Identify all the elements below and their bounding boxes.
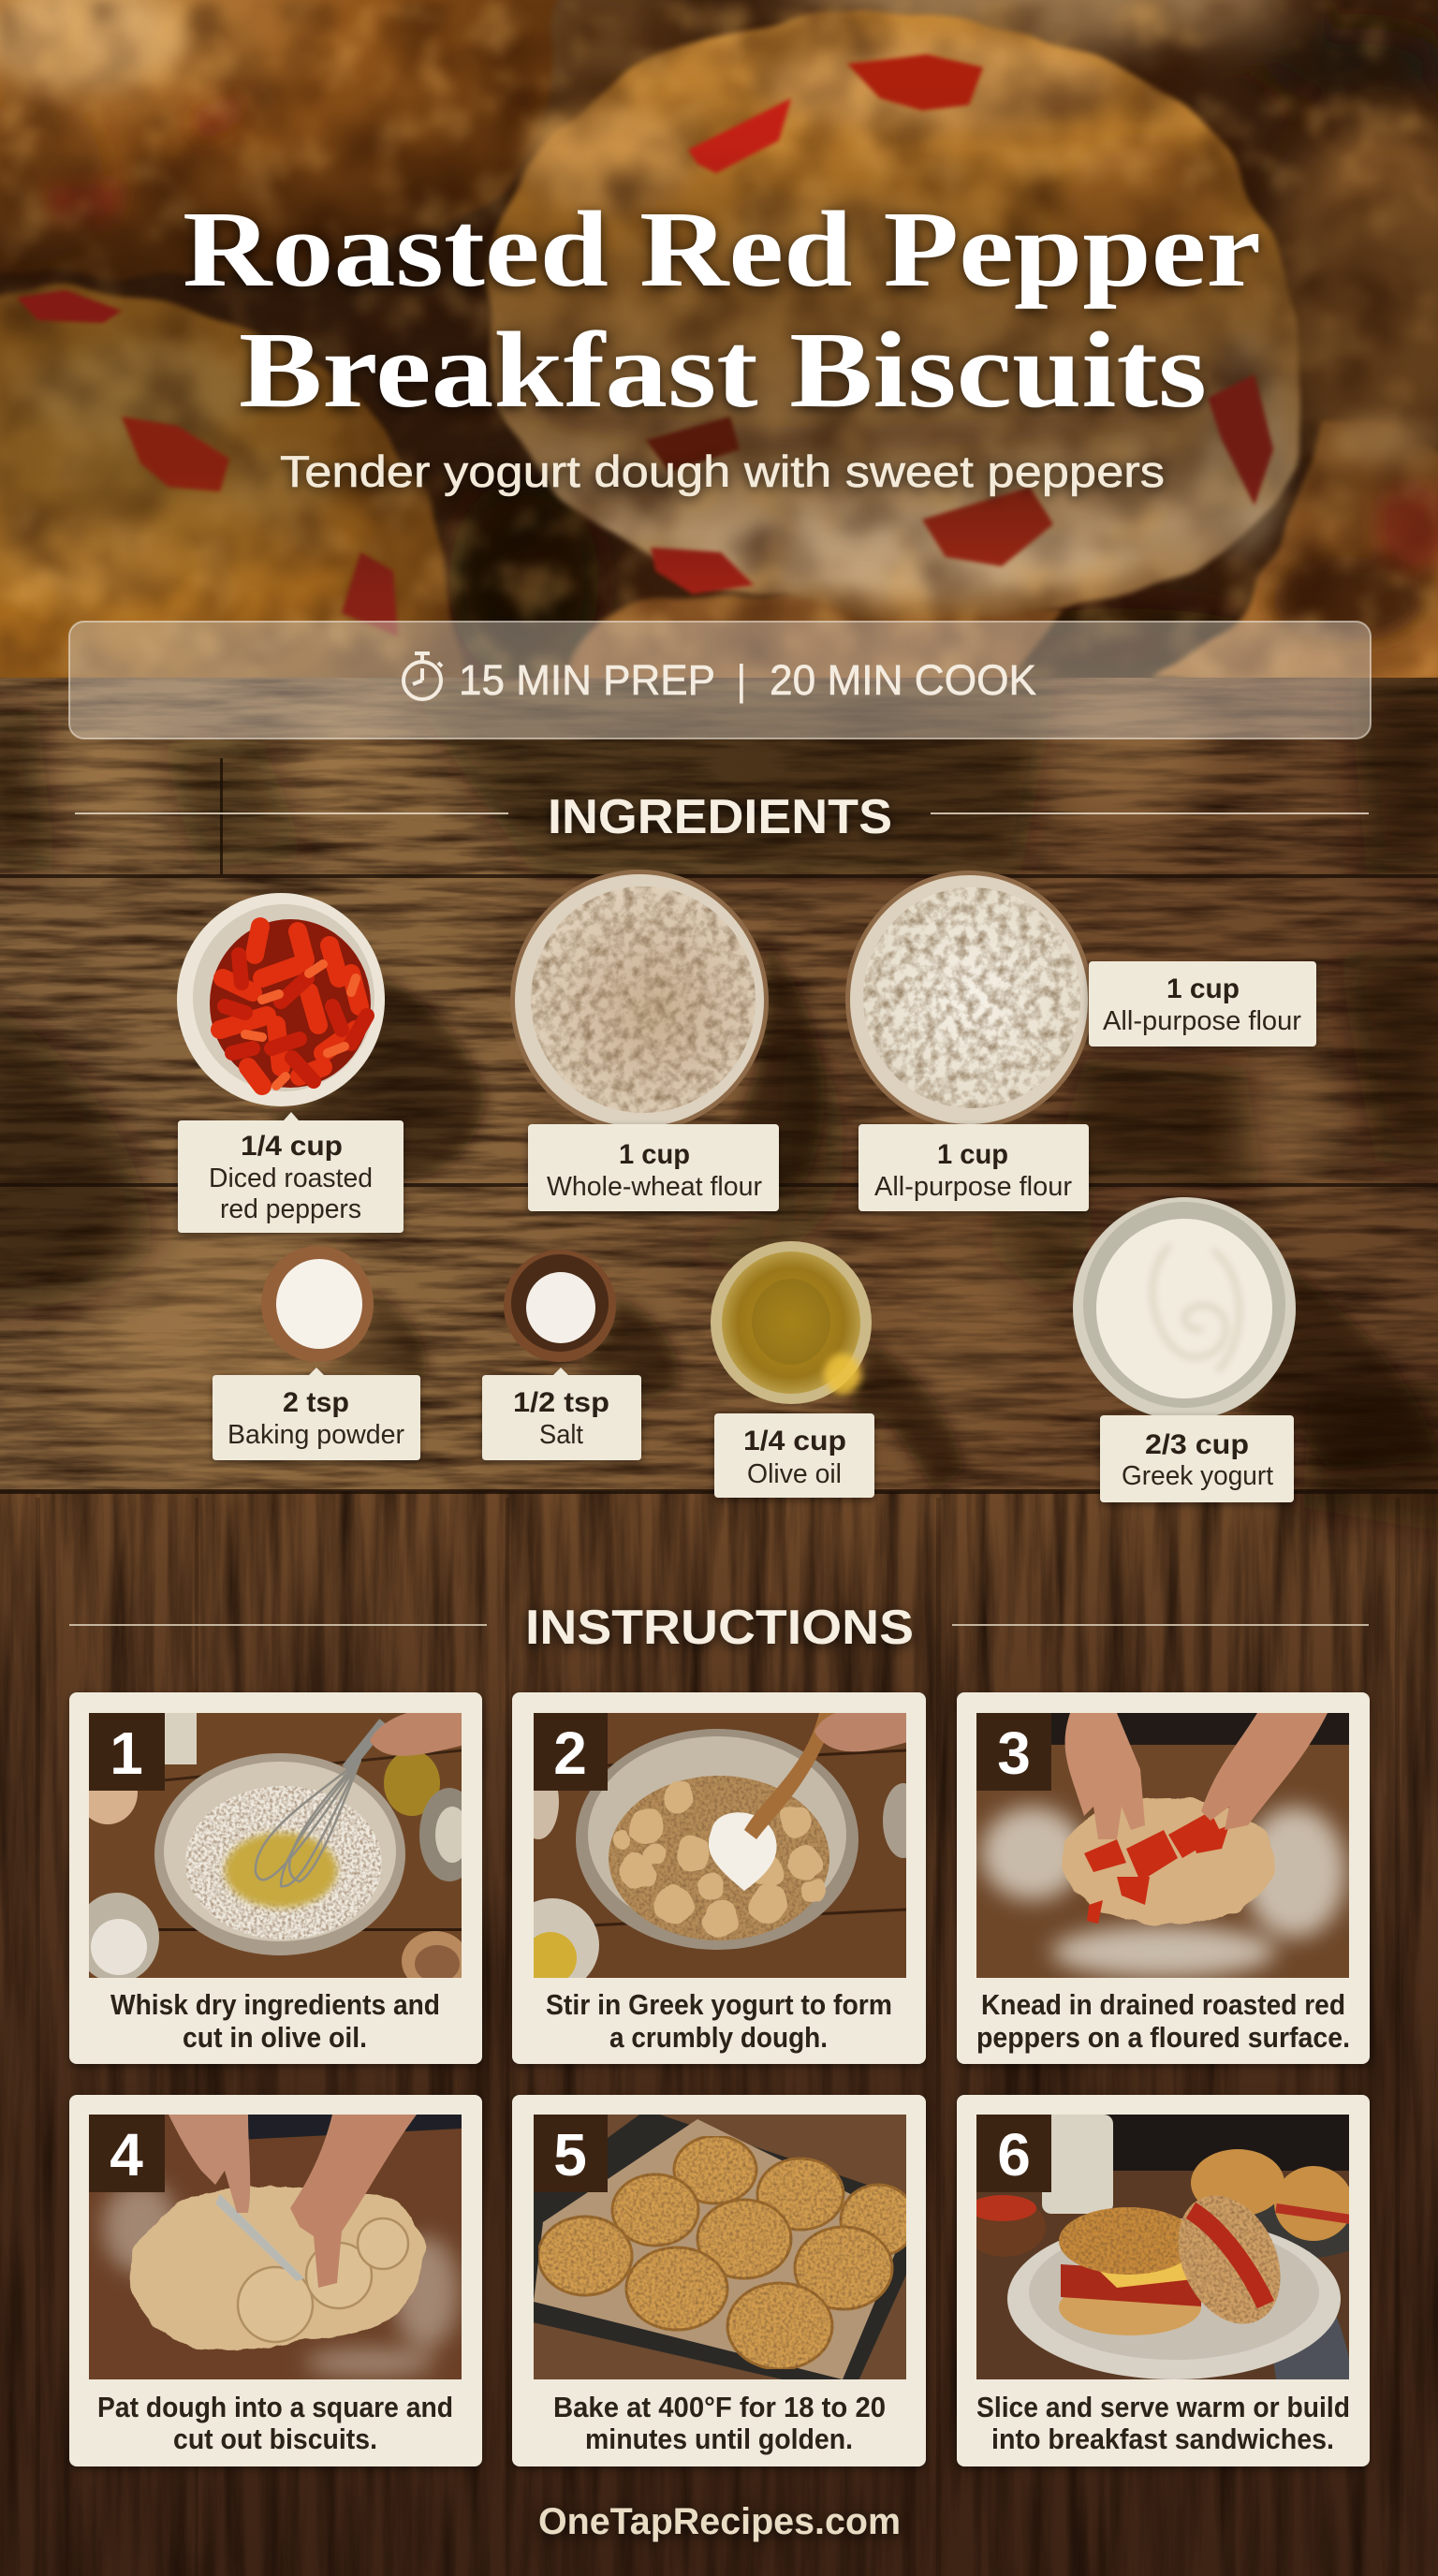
label: all-purpose flour side: 1 cup [1167,973,1240,1004]
icon: stopwatch [404,653,442,699]
step 1 caption: Whisk dry ingredients and [110,1988,440,2021]
step 1 caption: cut in olive oil. [183,2021,367,2054]
photo: stirring yogurt into dough [506,1703,927,1992]
peppers in biscuits [17,54,1273,637]
panel: step 1 [69,1692,482,2064]
step number 3: 3 [997,1720,1031,1787]
label: baking powder [213,1368,420,1460]
heading: ingredients: INGREDIENTS [548,790,892,844]
step 4 caption: cut out biscuits. [173,2422,377,2455]
bowl: olive oil [711,1241,872,1404]
panel: step 2 [506,1692,927,2064]
label: whole-wheat flour: 1 cup [619,1139,690,1170]
title: Roasted Red Pepper [183,190,1261,310]
label: diced roasted red peppers: 1/4 cup [241,1131,343,1162]
step 5 caption [553,2391,886,2455]
label: greek yogurt [1100,1415,1294,1502]
bowl: all-purpose flour [845,871,1093,1129]
footer: website: OneTapRecipes.com [538,2501,901,2542]
label: baking powder: Baking powder [227,1420,404,1450]
label: salt [482,1368,641,1460]
label: whole-wheat flour: Whole-wheat flour [547,1172,762,1202]
label: greek yogurt: 2/3 cup [1145,1429,1249,1460]
step 1 caption [110,1988,440,2054]
bowl: baking powder [261,1246,374,1362]
step 2 caption: a crumbly dough. [609,2021,828,2054]
photo: kneading peppers into dough [976,1713,1349,1978]
photo: biscuit breakfast sandwiches [963,2115,1379,2379]
step number 6 [976,2115,1051,2192]
title: Breakfast Biscuits [239,311,1207,431]
photo: whisking flour in a bowl [75,1705,482,1991]
bowl cast shadows [271,973,487,1184]
step number 2 [534,1713,608,1791]
label: whole-wheat flour [528,1124,779,1211]
time pill [69,622,1371,739]
label: all-purpose flour: 1 cup [937,1139,1008,1170]
dappled light and shadow [0,678,1438,1535]
title [183,190,1261,431]
label: diced roasted red peppers: red peppers [220,1194,361,1224]
label: olive oil: 1/4 cup [743,1426,846,1456]
heading: instructions: INSTRUCTIONS [525,1601,914,1655]
label: olive oil [714,1413,874,1498]
subtitle: Tender yogurt dough with sweet peppers [280,446,1165,496]
crust texture [0,0,1438,678]
step 3 caption [976,1988,1350,2054]
step number 1: 1 [110,1720,143,1787]
step 4 caption [97,2391,453,2455]
panel: wood background [0,678,1438,2576]
step 2 caption: Stir in Greek yogurt to form [546,1988,892,2021]
step 3 caption: peppers on a floured surface. [976,2021,1350,2054]
title scrim [0,0,1438,608]
panel: step 6 [957,2095,1379,2466]
step number 4: 4 [110,2121,143,2188]
step number 5 [534,2115,608,2192]
label: all-purpose flour: All-purpose flour [874,1172,1072,1202]
step 6 caption: Slice and serve warm or build [976,2391,1350,2423]
label: greek yogurt: Greek yogurt [1122,1461,1273,1491]
panel: hero biscuit photo [0,0,1438,688]
prep and cook times: 15 MIN PREP [459,656,715,704]
panel: step 4 [69,2095,482,2466]
bowl: whole-wheat flour [510,870,769,1132]
top-left biscuit [0,0,558,276]
bowl: roasted red peppers [177,893,385,1106]
step number 5: 5 [553,2121,587,2188]
panel: step 3 [957,1692,1370,2064]
photo: baked biscuits on tray [524,2110,936,2395]
bottom centre biscuit [562,596,1058,683]
left biscuit [0,292,463,688]
label: diced roasted red peppers: Diced roasted [209,1164,373,1193]
step number 4 [89,2115,165,2192]
step number 2: 2 [553,1720,587,1787]
label: baking powder: 2 tsp [283,1387,349,1418]
bowl: salt [504,1250,616,1362]
step number 6: 6 [997,2121,1031,2188]
step 6 caption: into breakfast sandwiches. [991,2422,1334,2455]
label: all-purpose flour side [1089,961,1316,1046]
label: all-purpose flour side: All-purpose flour [1103,1006,1301,1036]
step 6 caption [976,2391,1350,2455]
label: diced roasted red peppers [178,1112,404,1233]
prep and cook times [459,656,1036,704]
step 5 caption: minutes until golden. [585,2422,853,2455]
right-lower biscuit [1152,416,1438,683]
step 2 caption [546,1988,892,2054]
panel: step 5 [512,2095,936,2466]
label: all-purpose flour [858,1124,1089,1211]
step 5 caption: Bake at 400°F for 18 to 20 [553,2391,886,2423]
step number 1 [89,1713,165,1791]
step 3 caption: Knead in drained roasted red [981,1988,1345,2021]
prep and cook times: | [736,656,747,704]
photo: cutting out biscuits [89,2115,462,2379]
label: olive oil: Olive oil [747,1459,842,1489]
panel: ingredients [177,870,1316,1502]
label: salt: Salt [539,1420,583,1450]
bowl: greek yogurt [1073,1197,1296,1420]
prep and cook times: 20 MIN COOK [770,656,1036,704]
step number 3 [976,1713,1051,1791]
step 4 caption: Pat dough into a square and [97,2391,453,2423]
label: salt: 1/2 tsp [513,1387,609,1418]
main biscuit [485,12,1300,620]
